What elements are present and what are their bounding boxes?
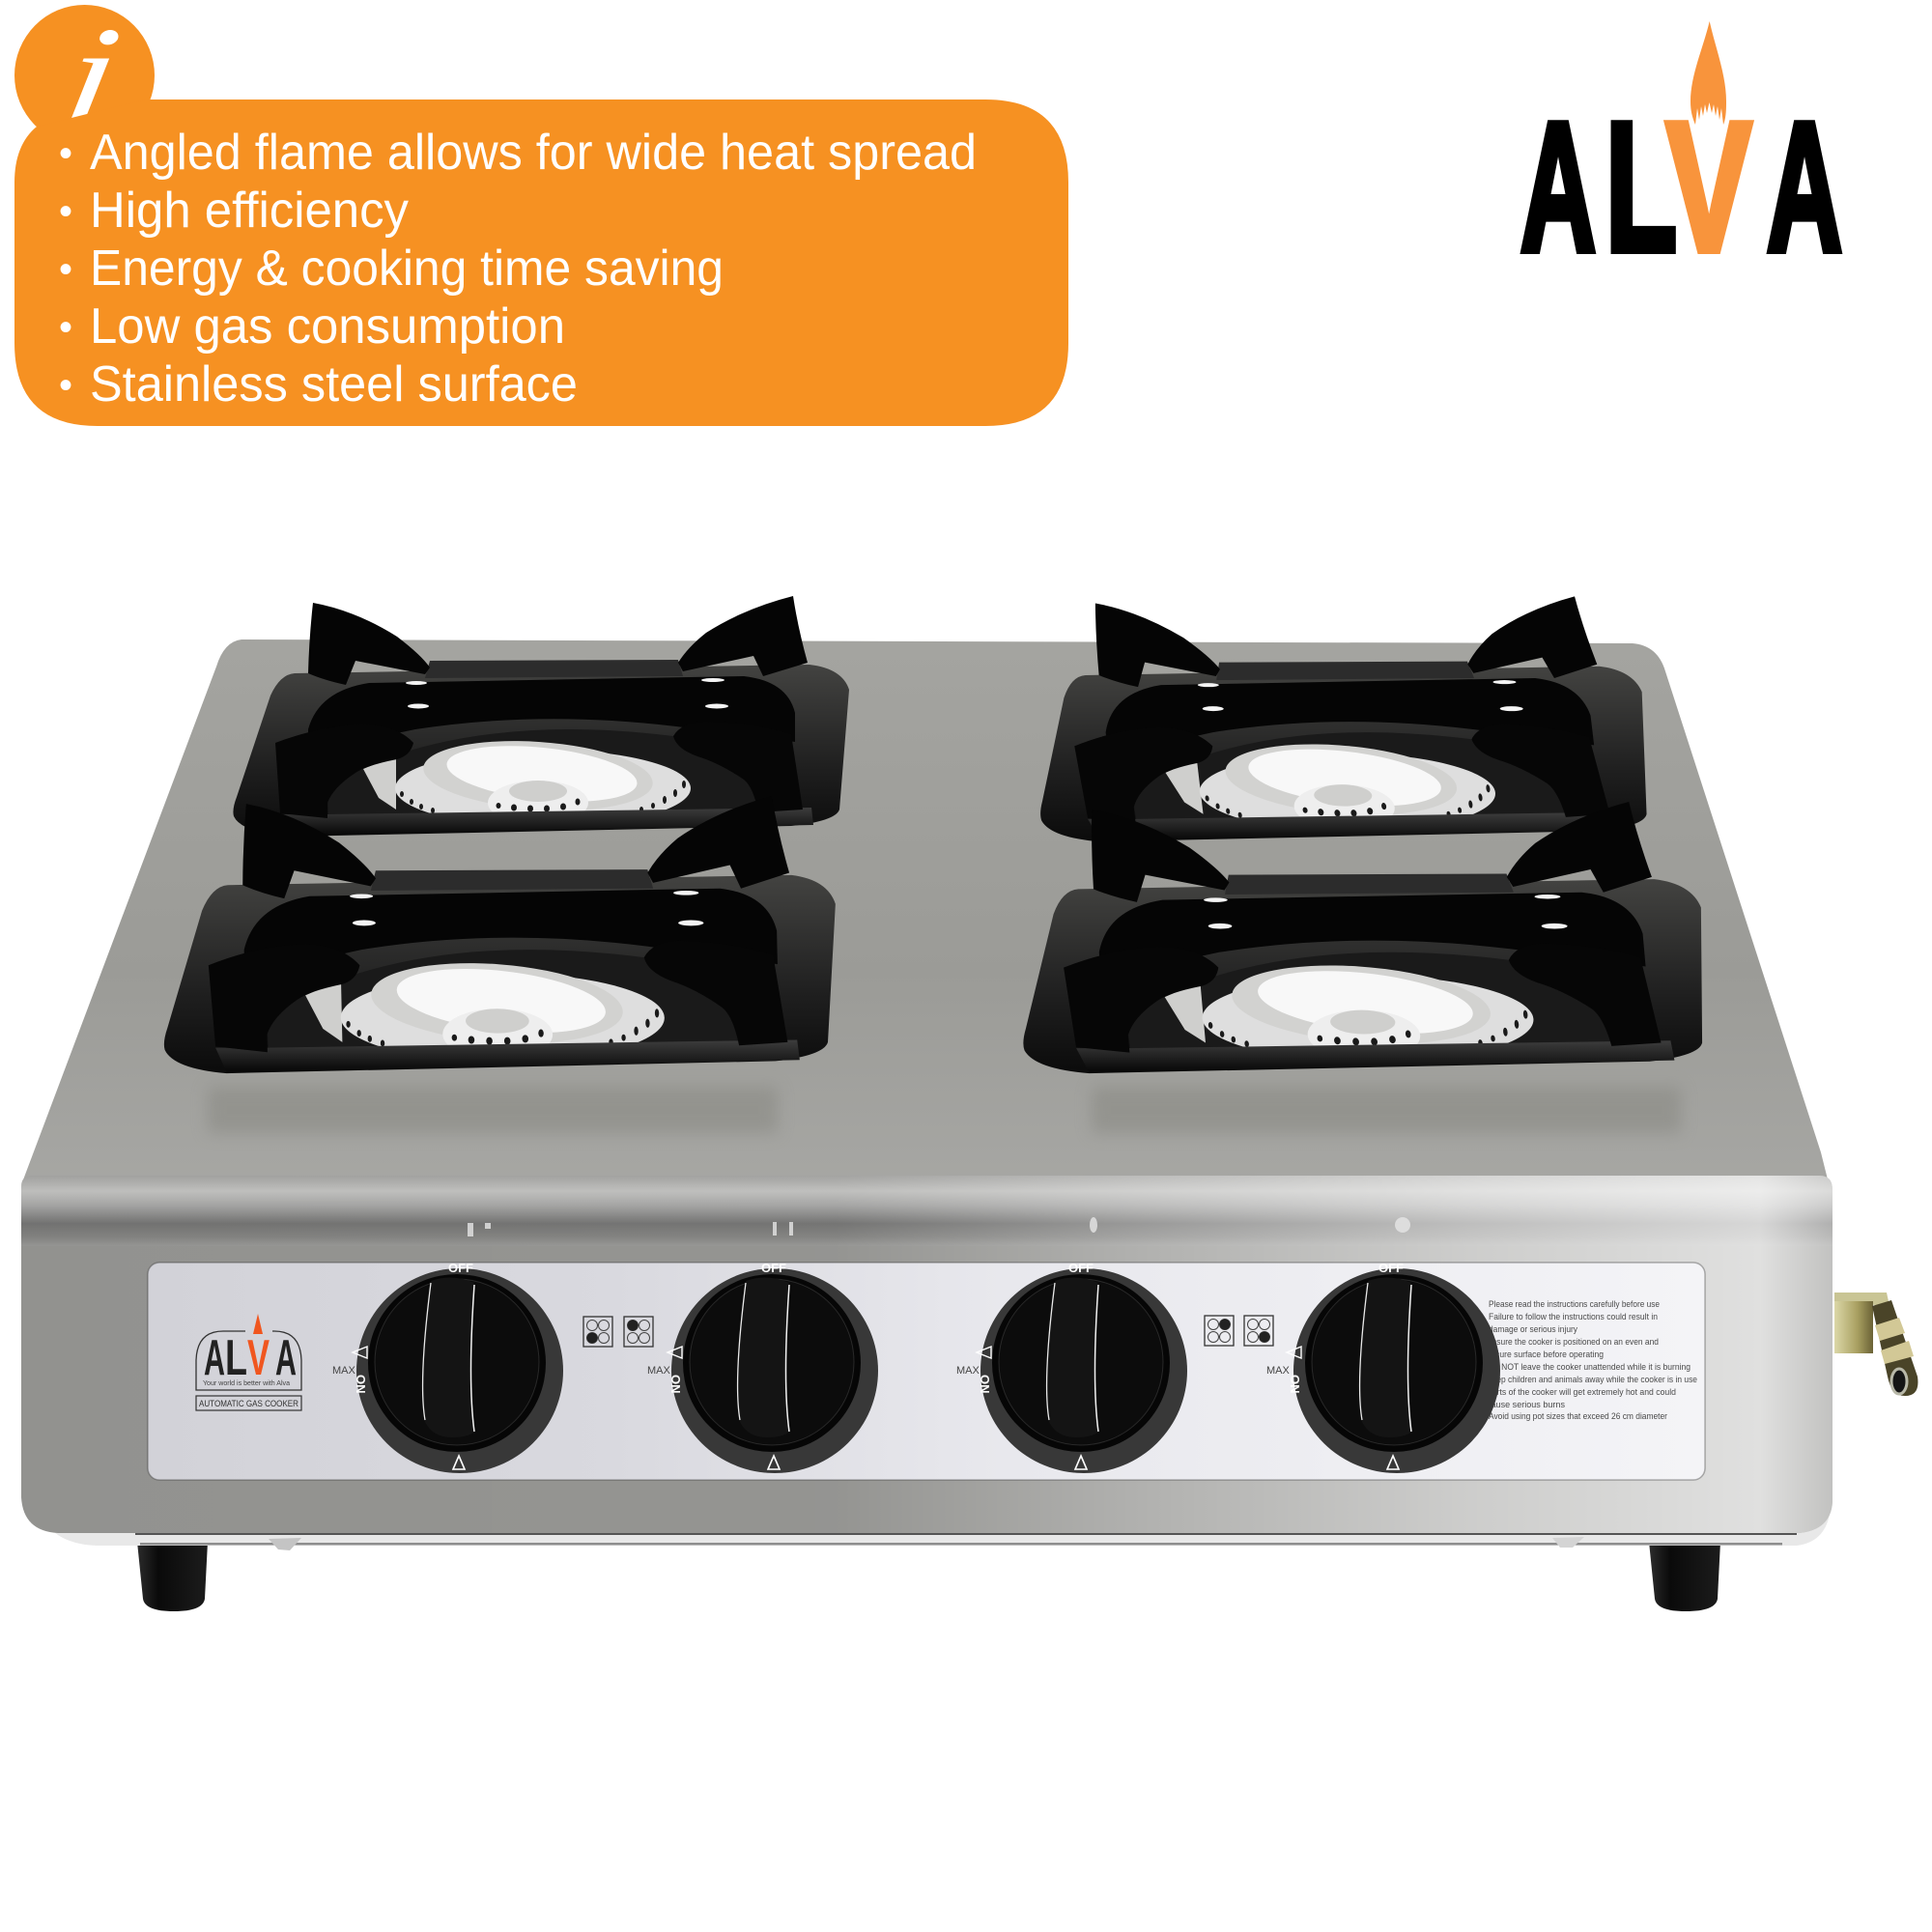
safety instructions: Please read the instructions carefully before use (1489, 1299, 1660, 1310)
feature bullet list: Stainless steel surface (90, 356, 578, 412)
plate logo (196, 1314, 301, 1410)
control plate (148, 1263, 1705, 1480)
plate logo: A (275, 1330, 297, 1386)
knob 2: MAX (647, 1365, 670, 1377)
icon: info badge: i (54, 0, 130, 154)
knob 3: ON (978, 1375, 992, 1393)
surface reflections (208, 1087, 1681, 1133)
icon: flame (1690, 21, 1726, 125)
wordmark: L (1605, 85, 1677, 290)
feature bullet list: • (59, 364, 72, 407)
feature bullet list: Energy & cooking time saving (90, 241, 724, 297)
bottom rail (39, 1507, 1831, 1550)
knob 2 (647, 1261, 878, 1473)
safety instructions: cause serious burns (1487, 1400, 1565, 1410)
feature bullet list: • (59, 306, 72, 349)
safety instructions: DO NOT leave the cooker unattended while it is burning (1487, 1362, 1690, 1373)
knob 1: OFF (448, 1261, 473, 1275)
gas inlet fitting (1834, 1293, 1918, 1396)
plate logo: Your world is better with Alva (203, 1380, 290, 1387)
front fascia (21, 1176, 1847, 1536)
feature bullet list (59, 125, 977, 412)
orange feature box (14, 99, 1068, 426)
wordmark (1520, 85, 1842, 290)
safety instructions: Ensure the cooker is positioned on an even and (1487, 1337, 1659, 1348)
knob 2: ON (668, 1375, 683, 1393)
feature bullet list: • (59, 132, 72, 175)
safety instructions: secure surface before operating (1487, 1350, 1604, 1360)
plate logo: L (225, 1330, 247, 1386)
knob 4 (1266, 1261, 1500, 1473)
knob 4: MAX (1266, 1365, 1291, 1377)
knob 4: ON (1288, 1375, 1302, 1393)
safety instructions: damage or serious injury (1489, 1324, 1577, 1335)
feature bullet list: High efficiency (90, 183, 409, 239)
safety instructions: Failure to follow the instructions could result in (1489, 1312, 1658, 1322)
knob 1: MAX (332, 1365, 355, 1377)
safety instructions: Avoid using pot sizes that exceed 26 cm diameter (1489, 1411, 1667, 1422)
stove illustration (21, 596, 1918, 1611)
burner: back right (1014, 596, 1660, 841)
wordmark: A (1767, 85, 1842, 290)
plate logo: A (204, 1330, 225, 1386)
knob 3 (956, 1261, 1187, 1473)
knob 3: OFF (1068, 1261, 1094, 1275)
feature bullet list: • (59, 248, 72, 291)
knob 2: OFF (761, 1261, 786, 1275)
wordmark: V (1666, 85, 1751, 290)
feature bullet list: Angled flame allows for wide heat spread (90, 125, 977, 181)
safety instructions (1487, 1299, 1697, 1422)
feature bullet list: • (59, 190, 72, 233)
panel: feature list (14, 0, 1068, 426)
burner: back left (233, 596, 849, 837)
knob 1: ON (354, 1375, 368, 1393)
plate logo: AUTOMATIC GAS COOKER (199, 1399, 298, 1409)
burner selector icons (583, 1316, 1273, 1347)
safety instructions: Keep children and animals away while the cooker is in use (1487, 1375, 1697, 1385)
safety instructions: Parts of the cooker will get extremely hot and could (1487, 1387, 1676, 1398)
wordmark: A (1520, 85, 1596, 290)
knob 4: OFF (1378, 1261, 1404, 1275)
cooktop surface (21, 639, 1829, 1246)
stove legs (137, 1542, 1720, 1611)
knob 1 (332, 1261, 563, 1473)
icon: info badge (14, 0, 155, 154)
burner: front left (158, 796, 839, 1073)
plate logo: V (247, 1330, 270, 1386)
burner: front right (1002, 802, 1716, 1073)
knob 3: MAX (956, 1365, 980, 1377)
feature bullet list: Low gas consumption (90, 298, 565, 355)
logo: ALVA brand mark (1520, 21, 1842, 290)
